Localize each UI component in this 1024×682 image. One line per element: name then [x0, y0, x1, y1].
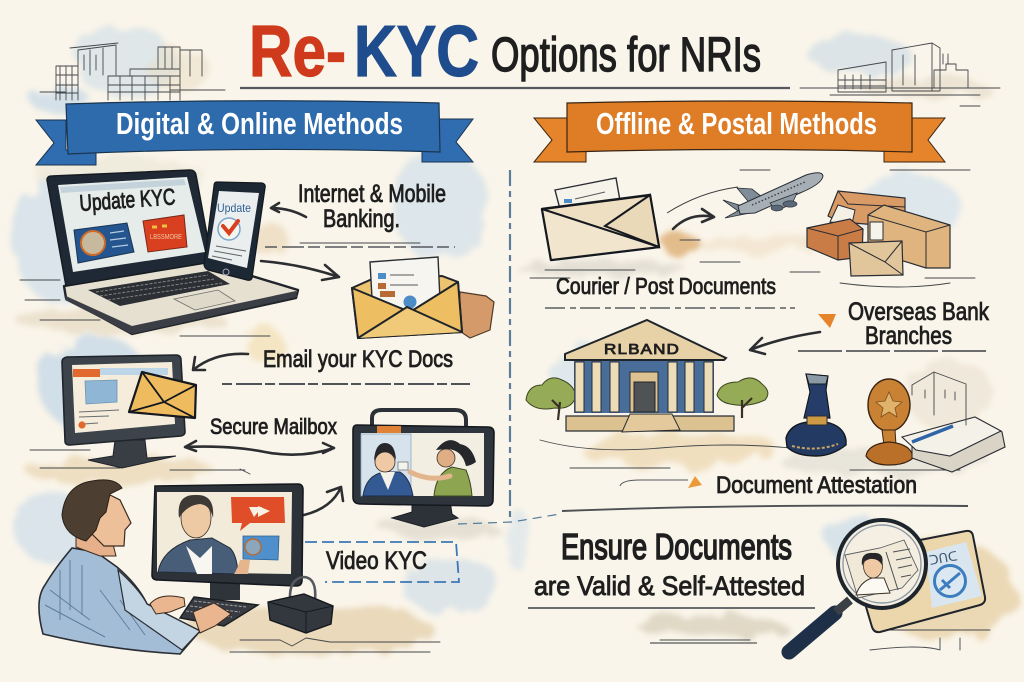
banner label: digital: Digital & Online Methods	[116, 106, 403, 141]
connector dashed line	[458, 514, 560, 524]
icon: main monitor with video banker	[152, 484, 303, 600]
icon: id card	[864, 531, 985, 632]
letter	[370, 257, 440, 314]
note: ensure documents	[534, 526, 805, 601]
label: document attestation: Document Attestation	[716, 472, 917, 499]
note: ensure documents: Ensure Documents	[561, 526, 792, 567]
label: overseas bank branches: Branches	[865, 322, 952, 350]
blue id card	[74, 223, 134, 263]
icon: padlock box	[268, 577, 333, 633]
icon: magnifying glass	[789, 520, 926, 652]
sketch: building behind stamp	[912, 372, 966, 425]
icon: smartphone	[204, 182, 265, 280]
blue id held	[234, 536, 279, 574]
divider	[545, 307, 795, 309]
title: KYC: KYC	[354, 12, 479, 92]
blue badge	[934, 566, 966, 596]
divider	[265, 246, 455, 248]
arrow: to mailbox monitor	[193, 354, 248, 370]
title: Options for NRIs: Options for NRIs	[491, 29, 761, 82]
label: courier post documents: Courier / Post Documents	[556, 273, 776, 299]
icon: bank building	[526, 320, 768, 432]
bank sign: RLBAND	[604, 341, 680, 358]
icon: open envelope with letter	[542, 178, 659, 260]
arrow: to bank	[750, 332, 820, 354]
touchpad	[174, 290, 235, 310]
arrow: to video monitor	[304, 487, 343, 515]
pointer line	[620, 480, 688, 486]
rule	[562, 506, 968, 511]
label: secure mailbox: Secure Mailbox	[210, 414, 337, 439]
icon: video call monitor	[353, 410, 494, 527]
icon: ink stamp	[786, 374, 846, 456]
yellow envelope	[129, 372, 196, 418]
trees	[526, 378, 768, 420]
icon: stacked packages	[807, 191, 950, 276]
callout box: video kyc	[305, 542, 459, 582]
title: Re-: Re-	[249, 12, 346, 92]
keyboard	[88, 271, 230, 306]
man on call	[363, 443, 413, 496]
orange marker	[818, 314, 836, 328]
sketch: right skyline	[800, 43, 1000, 106]
red tick	[223, 221, 238, 233]
arrow: to envelope	[261, 261, 339, 280]
woman on call	[398, 440, 476, 496]
icon: yellow envelope with box	[352, 257, 494, 338]
label: internet and mobile banking: Banking.	[323, 205, 400, 233]
flight trail	[667, 187, 738, 213]
banner: offline and postal methods	[534, 101, 945, 162]
orange marker	[688, 476, 702, 488]
card text: ᑐᑎᑕ	[928, 548, 959, 568]
red card: LBSSMORE	[150, 234, 182, 241]
rule	[528, 607, 815, 609]
icon: monitor with email	[62, 355, 196, 468]
arm	[118, 570, 200, 650]
icon: airplane	[723, 173, 823, 218]
screen heading: Update KYC: Update KYC	[79, 183, 176, 216]
phone text: Update	[217, 201, 251, 215]
face	[88, 492, 131, 546]
icon: wooden stamp	[866, 379, 913, 465]
banner: digital and online methods	[36, 101, 473, 165]
title underline	[240, 87, 790, 89]
person at desk	[39, 480, 231, 654]
hand two	[193, 603, 231, 633]
sketch: left skyline	[40, 43, 225, 100]
note: ensure documents: are Valid & Self-Attested	[534, 571, 805, 601]
label: email your kyc docs: Email your KYC Docs	[263, 346, 453, 373]
arrow: two-way	[185, 441, 334, 455]
label: overseas bank branches: Overseas Bank	[848, 298, 989, 326]
arrow: to phone	[271, 203, 306, 217]
icon: keyboard	[180, 597, 258, 626]
sketch: ground scribbles	[20, 170, 990, 652]
banner label: offline: Offline & Postal Methods	[596, 106, 877, 141]
hair	[62, 480, 122, 541]
label: overseas bank branches	[848, 298, 989, 350]
icon: documents	[902, 417, 1005, 472]
photo inside lens	[856, 553, 890, 595]
hand one	[150, 596, 185, 614]
stroke	[650, 642, 757, 644]
label: internet and mobile banking	[298, 180, 446, 233]
label: video kyc: Video KYC	[326, 547, 427, 575]
neck	[76, 532, 116, 556]
icon: laptop	[47, 170, 298, 334]
divider	[798, 350, 986, 352]
label: internet and mobile banking: Internet & Mobile	[298, 180, 446, 208]
shirt	[39, 548, 200, 654]
divider	[222, 383, 470, 385]
red card	[143, 215, 187, 252]
arrow: to plane	[673, 209, 714, 229]
red speech bubble	[231, 497, 285, 531]
title	[249, 12, 761, 92]
section divider	[509, 170, 511, 522]
banker on screen	[158, 495, 238, 574]
